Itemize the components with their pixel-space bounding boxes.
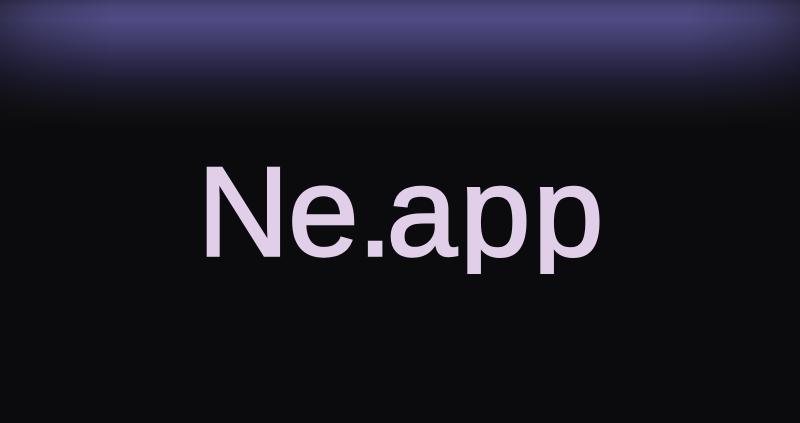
title: Ne.app wordmark: Ne.app [198,140,604,282]
top glow band [0,0,800,110]
